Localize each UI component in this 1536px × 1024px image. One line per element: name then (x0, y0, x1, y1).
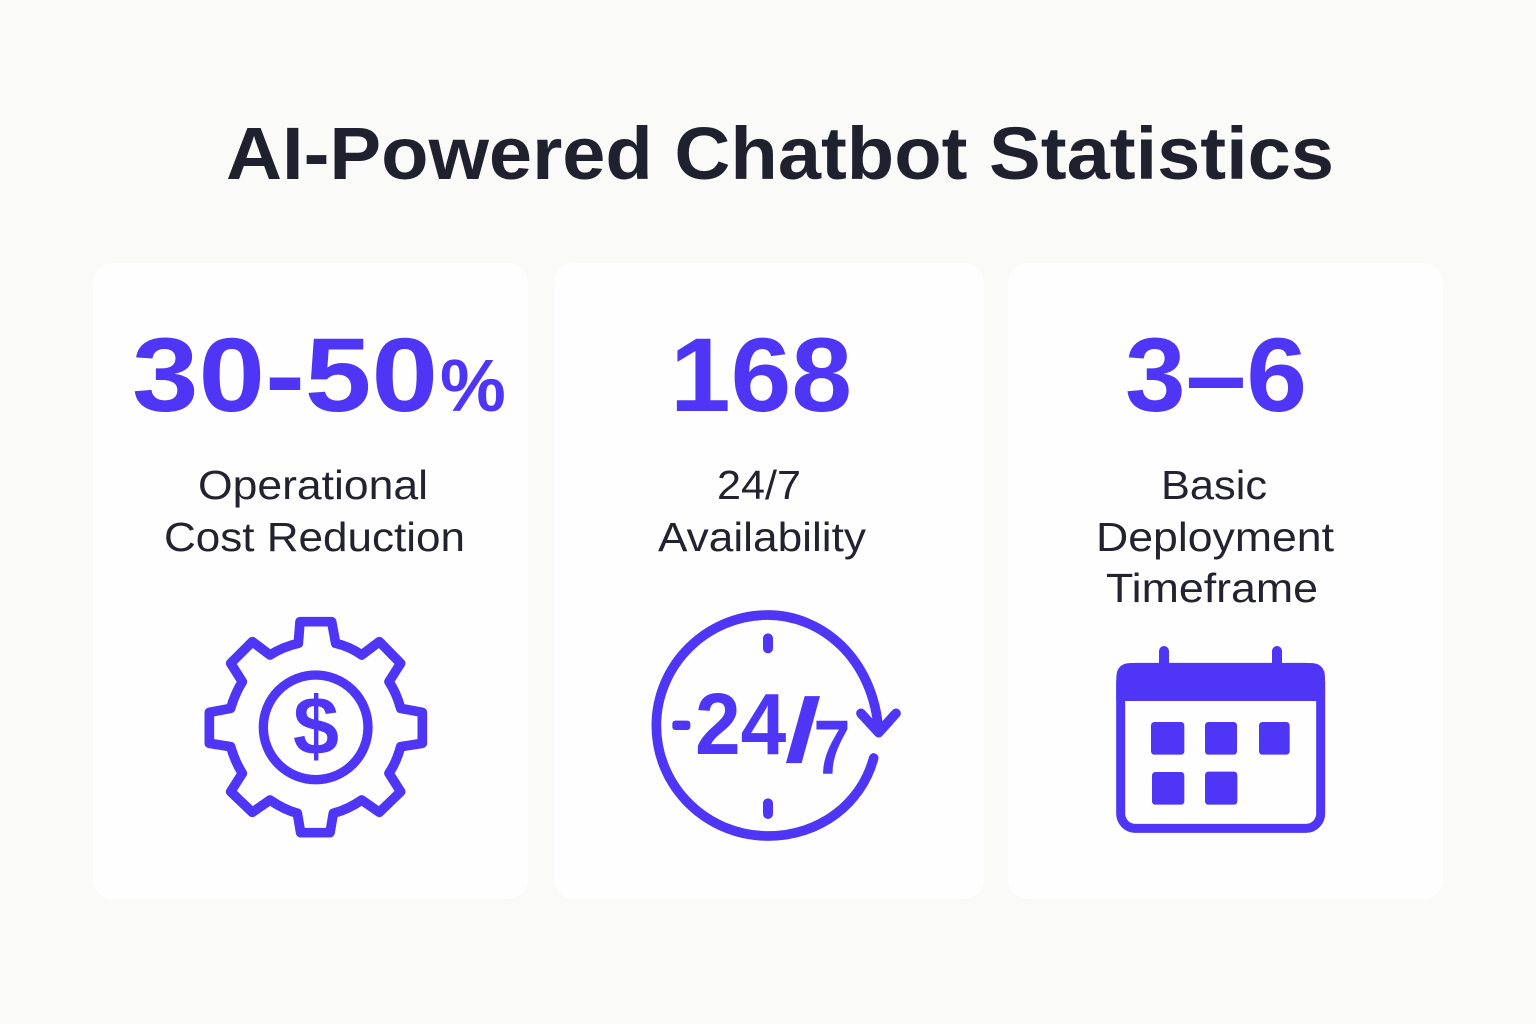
statistic: 3-6: 3–6 (1125, 317, 1307, 434)
title: AI-Powered Chatbot Statistics (226, 112, 1334, 195)
label: basic deployment timeframe: Timeframe (1106, 565, 1318, 611)
panel: 24/7 availability (554, 263, 984, 899)
label: 24/7 availability (658, 462, 867, 560)
label: basic deployment timeframe: Basic (1161, 462, 1267, 508)
icon: 24/7 clock with circular arrow (656, 615, 896, 836)
card background (554, 263, 984, 899)
card background (93, 263, 528, 899)
icon: gear with dollar sign: $ (293, 679, 339, 772)
label: operational cost reduction (164, 462, 465, 560)
icon: 24/7 clock with circular arrow: 24 (695, 675, 787, 773)
statistic: 168: 168 (670, 317, 852, 434)
label: basic deployment timeframe: Deployment (1096, 514, 1335, 560)
icon: 24/7 clock with circular arrow: / (785, 681, 821, 781)
icon: calendar (1116, 646, 1325, 828)
label: operational cost reduction: Operational (198, 462, 428, 508)
icon: 24/7 clock with circular arrow: 7 (814, 705, 850, 791)
label: basic deployment timeframe (1096, 462, 1335, 611)
label: 24/7 availability: Availability (658, 514, 867, 560)
card background (1008, 263, 1443, 899)
icon: gear with dollar sign (209, 622, 422, 833)
label: 24/7 availability: 24/7 (717, 462, 801, 508)
label: operational cost reduction: Cost Reduction (164, 514, 465, 560)
panel: operational cost reduction (93, 263, 528, 899)
statistic: 30-50%: 30-50 % (132, 317, 506, 434)
panel: basic deployment timeframe (1008, 263, 1443, 899)
